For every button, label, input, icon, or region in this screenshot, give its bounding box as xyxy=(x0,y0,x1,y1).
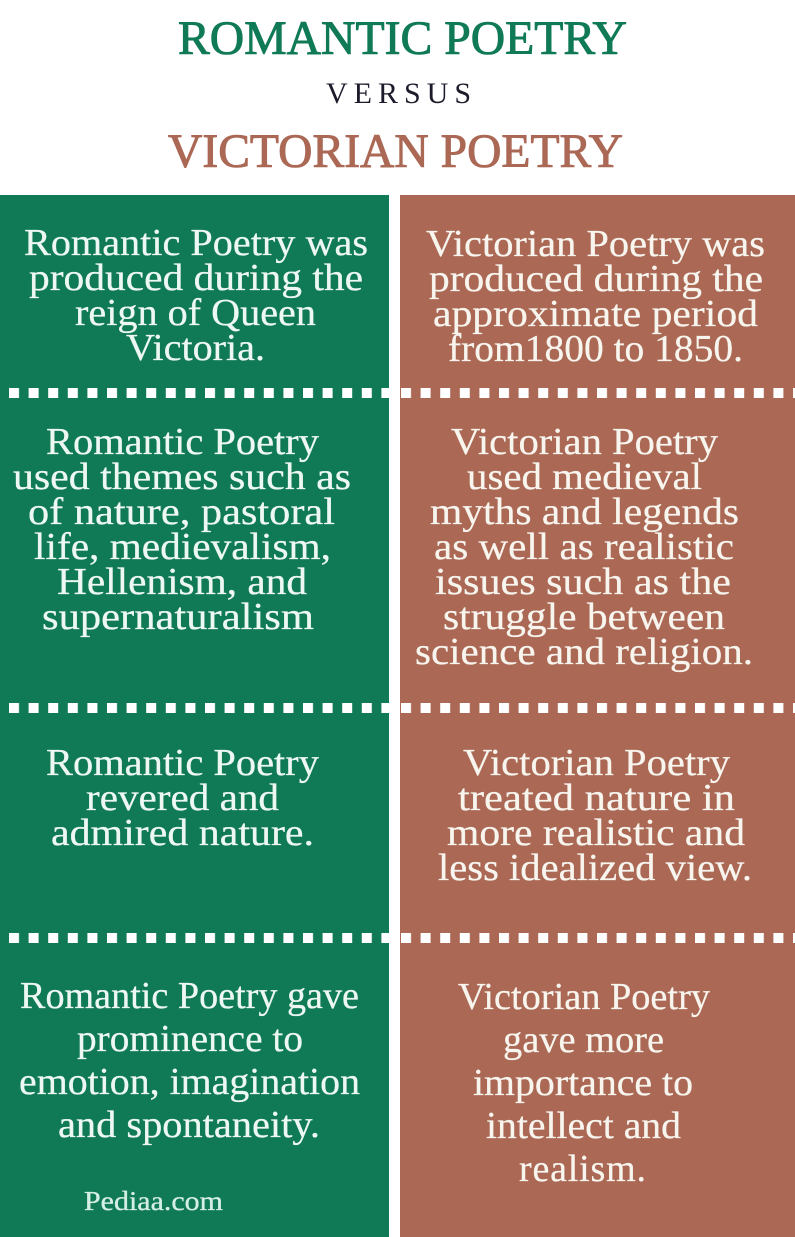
text: Victorian importance: realism. xyxy=(519,1148,646,1190)
text: Romantic period: Victoria. xyxy=(126,327,265,369)
text: Victorian period: from1800 to 1850. xyxy=(448,328,743,370)
text: Victorian importance: gave more xyxy=(503,1019,664,1061)
title: Victorian Poetry: VICTORIAN POETRY xyxy=(168,125,623,178)
text: Victorian period: Victorian Poetry was xyxy=(426,223,765,265)
text: Romantic themes: Hellenism, and xyxy=(57,561,307,603)
divider row 3 dots xyxy=(0,933,795,943)
logo: Pediaa.com: Pediaa.com xyxy=(84,1186,223,1216)
text: Victorian importance: intellect and xyxy=(486,1105,681,1147)
text: Romantic prominence: and spontaneity. xyxy=(58,1104,320,1146)
text: Romantic prominence: prominence to xyxy=(77,1018,303,1060)
text: Victorian view of nature xyxy=(438,742,752,889)
text: Victorian importance xyxy=(458,976,710,1190)
text: Victorian view of nature: treated nature in xyxy=(458,777,735,819)
text: Romantic themes: used themes such as xyxy=(13,456,351,498)
text: Victorian view of nature: less idealized view. xyxy=(438,847,752,889)
text: Victorian themes: Victorian Poetry xyxy=(451,421,718,463)
text: Romantic prominence: Romantic Poetry gave xyxy=(20,975,359,1017)
text: Romantic themes: supernaturalism xyxy=(42,596,314,638)
text: Romantic view of nature: Romantic Poetry xyxy=(46,742,319,784)
text: Victorian period xyxy=(426,223,765,370)
text: Victorian period: produced during the xyxy=(429,258,763,300)
text: Romantic period: reign of Queen xyxy=(75,292,316,334)
text: Victorian view of nature: Victorian Poetry xyxy=(463,742,730,784)
text: Romantic prominence xyxy=(19,975,360,1146)
divider row 1 dots xyxy=(0,388,795,398)
text: Victorian importance: Victorian Poetry xyxy=(458,976,710,1018)
text: Victorian period: approximate period xyxy=(433,293,758,335)
text: Romantic prominence: emotion, imagination xyxy=(19,1061,360,1103)
text: Victorian themes: myths and legends xyxy=(430,491,739,533)
text: Romantic view of nature xyxy=(46,742,319,854)
panel: Romantic Poetry column xyxy=(0,195,389,1237)
subtitle: versus: VERSUS xyxy=(326,77,471,110)
text: Romantic themes: Romantic Poetry xyxy=(46,421,319,463)
text: Romantic period: Romantic Poetry was xyxy=(24,222,368,264)
text: Victorian view of nature: more realistic and xyxy=(447,812,745,854)
text: Romantic themes: of nature, pastoral xyxy=(28,491,335,533)
text: Romantic period xyxy=(24,222,368,369)
text: Victorian themes: science and religion. xyxy=(415,631,753,673)
text: Romantic themes: life, medievalism, xyxy=(34,526,331,568)
text: Victorian themes: as well as realistic xyxy=(434,526,734,568)
panel: Victorian Poetry column xyxy=(400,195,795,1237)
text: Victorian themes xyxy=(415,421,753,673)
text: Victorian themes: used medieval xyxy=(467,456,702,498)
title: Romantic Poetry: ROMANTIC POETRY xyxy=(178,12,627,65)
text: Romantic themes xyxy=(13,421,351,638)
divider row 2 dots xyxy=(0,703,795,713)
text: Victorian themes: issues such as the xyxy=(435,561,731,603)
text: Romantic view of nature: admired nature. xyxy=(51,812,314,854)
text: Romantic period: produced during the xyxy=(29,257,363,299)
text: Romantic view of nature: revered and xyxy=(86,777,279,819)
text: Victorian importance: importance to xyxy=(473,1062,693,1104)
text: Victorian themes: struggle between xyxy=(443,596,725,638)
